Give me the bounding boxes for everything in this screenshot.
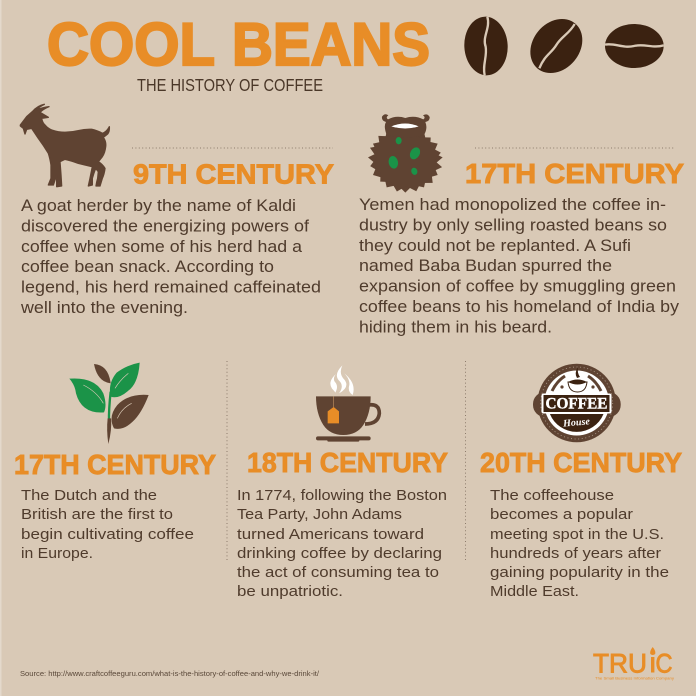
heading: 18TH CENTURY — [247, 447, 448, 478]
text block: they could not be replanted. A Sufi — [359, 237, 631, 255]
badge wordmark: COFFEE — [546, 396, 608, 412]
text block: in Europe. — [21, 545, 93, 562]
heading: 20TH CENTURY — [480, 447, 682, 478]
text block: well into the evening. — [20, 299, 188, 317]
icon: goat — [20, 104, 109, 187]
text block — [490, 487, 669, 600]
text block: the act of consuming tea to — [237, 564, 439, 581]
logo: TRUIC: C — [656, 648, 672, 678]
text block: turned Americans toward — [237, 526, 424, 543]
text block: expansion of coffee by smuggling green — [359, 278, 676, 296]
text block: named Baba Budan spurred the — [359, 257, 612, 275]
text block: meeting spot in the U.S. — [490, 526, 664, 543]
icon: teacup with tea bag — [316, 365, 379, 442]
icon: horizontal bean — [605, 24, 664, 68]
text block: begin cultivating coffee — [21, 526, 194, 543]
icon: upright bean — [463, 16, 509, 76]
icon: beard with green beans — [361, 114, 450, 201]
panel: 17th century Yemen — [359, 114, 684, 336]
panel: 18th century — [237, 365, 448, 600]
subtitle: THE HISTORY OF COFFEE — [137, 75, 323, 95]
panel: 17th century Europe — [14, 363, 216, 562]
text block: drinking coffee by declaring — [237, 545, 442, 562]
text block: legend, his herd remained caffeinated — [21, 279, 321, 297]
divider — [132, 147, 333, 149]
heading: 17TH CENTURY — [14, 449, 216, 480]
text block: British are the first to — [21, 506, 173, 523]
panel: 20th century — [480, 364, 682, 600]
title — [47, 11, 430, 78]
text block: In 1774, following the Boston — [237, 487, 447, 504]
text block: becomes a popular — [490, 506, 633, 523]
icon: coffee plant — [69, 363, 149, 444]
text block: Tea Party, John Adams — [237, 506, 402, 523]
title: BEANS — [232, 11, 430, 78]
heading: 17TH CENTURY — [465, 158, 684, 189]
logo: TRUIC: TRU — [593, 648, 647, 678]
source note: Source: http://www.craftcoffeeguru.com/what-is-the-history-of-coffee-and-why-we-drink-it/ — [20, 669, 320, 678]
heading: 9TH CENTURY — [133, 158, 334, 190]
badge script: House — [562, 416, 591, 430]
text block — [21, 487, 194, 562]
text block: hundreds of years after — [490, 545, 661, 562]
text block — [20, 197, 321, 317]
text block: discovered the energizing powers of — [21, 217, 309, 235]
text block: be unpatriotic. — [237, 583, 343, 600]
text block: hiding them in his beard. — [359, 318, 552, 336]
logo: TRUIC — [593, 647, 674, 680]
logo: TRUIC: The Small Business Information Company — [595, 676, 674, 680]
icon: tilted bean — [520, 9, 593, 83]
icons: three coffee beans — [463, 9, 664, 83]
text block — [359, 196, 680, 336]
text block: gaining popularity in the — [490, 564, 669, 581]
text block: coffee when some of his herd had a — [21, 238, 303, 256]
text block: coffee bean snack. According to — [21, 258, 274, 276]
text block: dustry by only selling roasted beans so — [359, 216, 667, 234]
text block: The coffeehouse — [490, 487, 614, 504]
text block: The Dutch and the — [21, 487, 157, 504]
divider — [475, 147, 675, 149]
text block: Middle East. — [490, 583, 579, 600]
title: COOL — [47, 11, 215, 78]
text block — [237, 487, 447, 600]
panel: 9th century — [20, 104, 334, 317]
text block: coffee beans to his homeland of India by — [359, 298, 680, 316]
icon: coffee house badge — [533, 364, 621, 442]
text block: Yemen had monopolized the coffee in- — [359, 196, 666, 214]
text block: A goat herder by the name of Kaldi — [21, 197, 296, 215]
